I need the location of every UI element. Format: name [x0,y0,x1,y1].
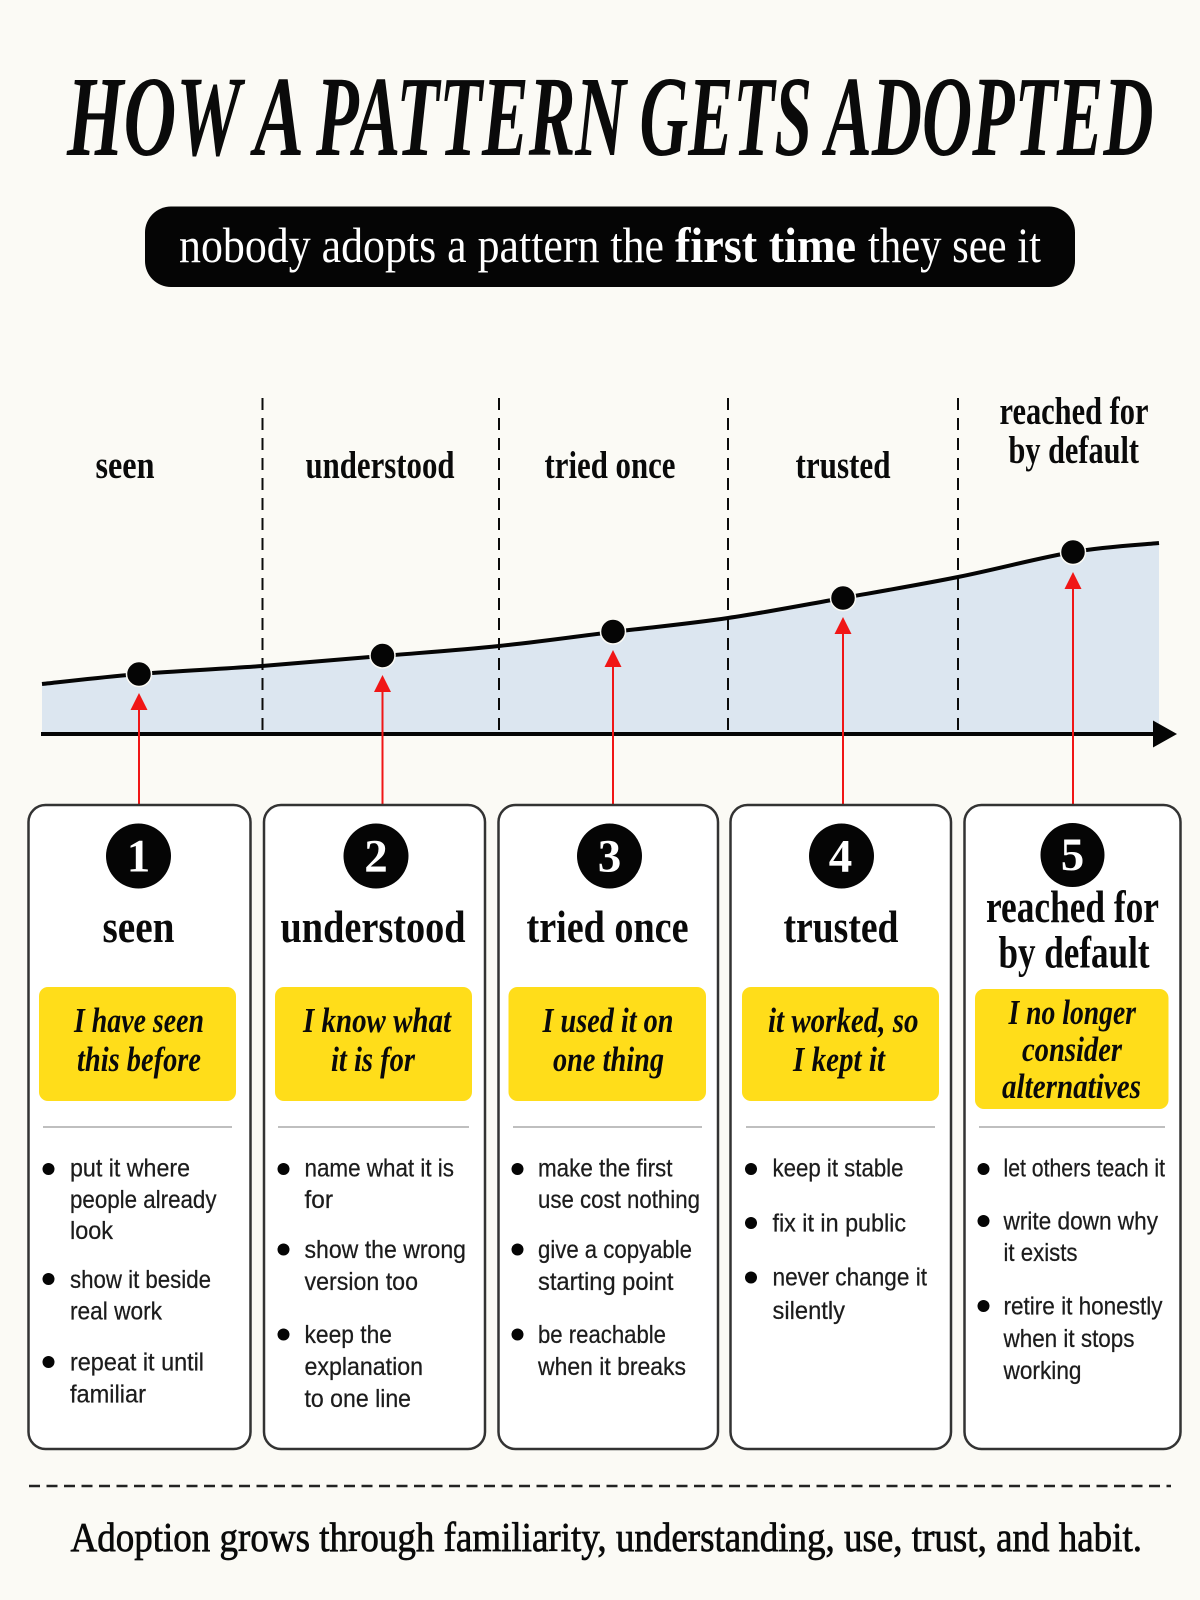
red arrow 3 [604,650,622,806]
bullet list: let others teach it [1004,1154,1165,1182]
bullet list: explanation [304,1353,423,1381]
heading: understood [280,901,466,952]
stage label: reached for by default: by default [1008,429,1139,472]
bullet list: keep the [304,1321,392,1349]
title: GETS [640,53,812,180]
bullet list: when it breaks [537,1353,686,1381]
quote: alternatives [1002,1067,1141,1106]
bullet list [512,1154,700,1381]
quote: it is for [331,1040,415,1079]
quote: this before [77,1040,201,1079]
stage label: trusted: trusted [796,444,891,487]
stage label: understood: understood [306,444,455,487]
quote [508,987,706,1101]
quote: I used it on [542,1001,674,1040]
bullet list: make the first [538,1154,673,1182]
number badge 3: 3 [598,830,621,882]
number badge 1 [106,824,171,888]
number badge 2: 2 [364,830,388,882]
quote: it worked, so [768,1001,918,1040]
quote: I have seen [73,1001,204,1040]
quote [742,987,939,1101]
bullet list: repeat it until [70,1348,204,1376]
subtitle pill: first time [675,217,856,273]
bullet list: use cost nothing [538,1186,700,1214]
bullet list [745,1154,927,1325]
stage label: reached for by default [1000,390,1148,472]
stage label: tried once: tried once [544,444,676,487]
stage dividers [262,398,958,733]
bullet list: version too [304,1268,418,1296]
stage label: reached for by default: reached for [1000,390,1148,433]
number badge 5: 5 [1061,829,1084,881]
bullet list [42,1154,217,1408]
curve markers [126,540,1086,686]
title [66,53,1153,180]
panel: reached for by default [964,805,1180,1449]
bullet list: give a copyable [538,1236,692,1264]
heading [986,881,1159,978]
heading: seen [102,901,174,952]
bullet list: when it stops [1003,1325,1134,1353]
adoption curve chart [41,390,1177,806]
bullet list: it exists [1004,1239,1078,1267]
subtitle pill [145,206,1075,287]
quote [39,987,236,1101]
red arrow 4 [834,617,852,806]
bullet list: working [1003,1357,1082,1385]
quote: I know what [302,1001,452,1040]
number badge 2 [344,824,408,888]
stage label: seen: seen [96,444,155,487]
quote: consider [1022,1030,1122,1069]
growth curve [42,543,1159,684]
bullet list: never change it [772,1264,927,1292]
red arrow 1 [130,693,148,806]
bullet list: show the wrong [304,1236,466,1264]
red arrow 5 [1064,572,1082,806]
bullet list: to one line [304,1385,411,1413]
time axis arrow [41,720,1177,748]
bullet list: silently [772,1297,845,1325]
quote: I kept it [792,1040,886,1079]
panel: seen [28,805,250,1449]
bullet list: people already [70,1186,217,1214]
red arrow 2 [374,675,391,806]
heading: by default [998,926,1150,978]
quote [975,989,1168,1109]
panel: trusted [730,805,951,1449]
bullet list: name what it is [304,1154,454,1182]
heading: tried once [526,901,688,952]
bullet list: for [304,1186,333,1214]
bullet list: familiar [70,1380,146,1408]
title: A [250,53,304,180]
bullet list: put it where [70,1154,190,1182]
bullet list [278,1154,466,1413]
number badge 4: 4 [829,830,852,882]
bullet list: look [70,1217,113,1245]
number badge 5 [1040,823,1104,887]
panel: tried once [498,805,718,1449]
subtitle pill: they see it [868,217,1041,273]
bullet list: starting point [538,1268,674,1296]
quote [275,987,472,1101]
bullet list: real work [70,1298,162,1326]
bullet list: be reachable [538,1321,666,1349]
bullet list: fix it in public [772,1210,906,1238]
quote: I no longer [1008,993,1136,1032]
heading: trusted [784,901,899,952]
number badge 3 [577,824,642,888]
panel: understood [264,805,485,1449]
title: HOW [66,53,246,180]
number badge 4 [809,824,874,888]
subtitle pill: nobody adopts a pattern the [179,217,664,273]
bullet list: retire it honestly [1004,1292,1163,1320]
bullet list: keep it stable [772,1154,904,1182]
bullet list: show it beside [70,1266,211,1294]
area under curve [42,543,1159,734]
bullet list [978,1154,1165,1385]
quote: one thing [553,1040,664,1079]
number badge 1: 1 [127,830,150,882]
bullet list: write down why [1003,1208,1158,1236]
title: PATTERN [315,53,628,180]
